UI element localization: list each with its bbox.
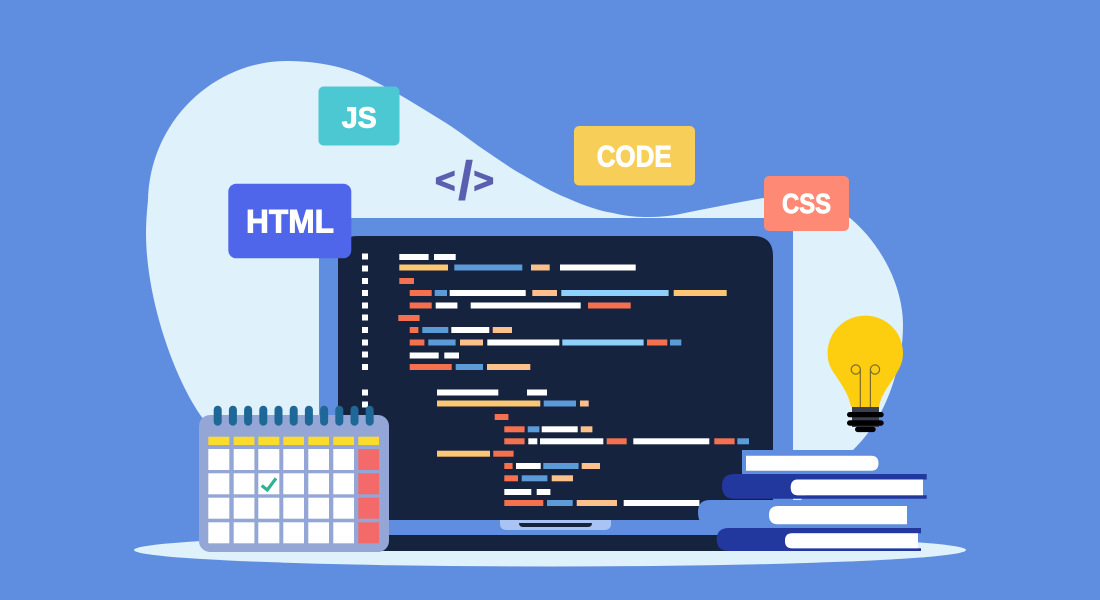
- HTML tag: HTML: [246, 204, 334, 240]
- code brackets icon: >: [474, 162, 494, 200]
- laptop base: [340, 520, 740, 535]
- light blob backdrop: [146, 61, 903, 520]
- code brackets icon: /: [458, 151, 473, 211]
- laptop screen: [338, 236, 773, 520]
- calendar body: [199, 415, 389, 552]
- calendar header row: [208, 437, 379, 445]
- third book: [698, 500, 907, 527]
- bulb screw rings: [847, 412, 884, 432]
- calendar weekend column: [358, 449, 379, 543]
- code brackets icon: <: [435, 162, 455, 200]
- JS tag: JS: [342, 102, 377, 134]
- stack of books: [698, 450, 927, 551]
- bulb filament: [851, 365, 880, 407]
- laptop: [319, 218, 793, 551]
- laptop lid: [319, 218, 793, 530]
- check mark: [262, 478, 276, 490]
- CSS tag: [764, 176, 849, 231]
- CODE tag: CODE: [597, 140, 672, 174]
- CSS tag: CSS: [782, 188, 831, 219]
- laptop lower deck: [340, 535, 740, 551]
- JS tag: [318, 86, 400, 146]
- bottom book: [717, 528, 921, 551]
- calendar rings: [214, 406, 374, 426]
- HTML tag: [228, 184, 351, 258]
- calendar: [199, 406, 389, 552]
- bulb glass: [828, 316, 903, 407]
- line-number dots: [362, 254, 368, 408]
- second book: [722, 474, 927, 499]
- CODE tag: [574, 126, 695, 186]
- laptop notch slot: [519, 523, 592, 527]
- ground ellipse: [134, 534, 966, 566]
- laptop notch: [500, 520, 611, 530]
- calendar day cells: [208, 449, 354, 543]
- top book: [742, 450, 882, 474]
- light bulb: [828, 316, 903, 432]
- code lines: [398, 254, 749, 506]
- bulb base: [852, 407, 879, 427]
